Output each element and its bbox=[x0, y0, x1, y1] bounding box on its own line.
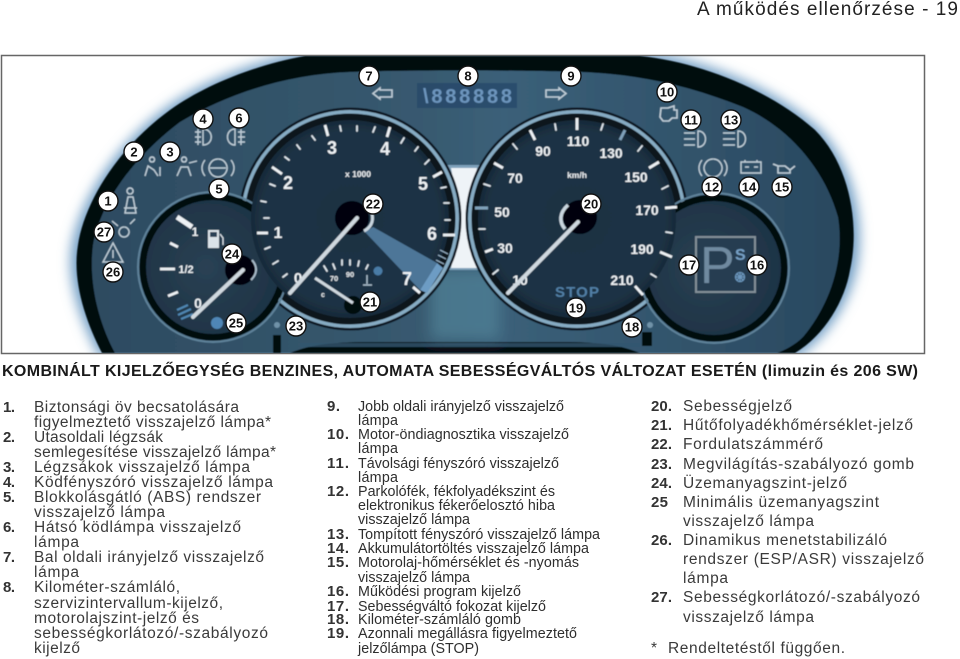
item 9: 9. bbox=[327, 398, 340, 415]
item 19: jelzőlámpa (STOP) bbox=[357, 641, 479, 657]
icon: ESP triangle bbox=[103, 243, 123, 262]
item 6 bbox=[3, 519, 241, 551]
item 8: kijelző bbox=[34, 640, 80, 657]
coolant temperature gauge bbox=[315, 260, 382, 314]
item 7: lámpa bbox=[34, 564, 79, 581]
callout 12: 12 bbox=[705, 180, 719, 194]
dashboard body bbox=[75, 56, 855, 353]
callout 27: 27 bbox=[97, 224, 111, 240]
item 19: Azonnali megállásra figyelmeztető bbox=[358, 626, 577, 642]
dimmer and trip knobs bbox=[273, 322, 653, 353]
item 25 bbox=[651, 494, 880, 530]
icon: seat belt bbox=[124, 188, 137, 213]
item 19 bbox=[327, 625, 577, 657]
item 2: Utasoldali légzsák bbox=[34, 429, 163, 446]
item 26: rendszer (ESP/ASR) visszajelző bbox=[683, 551, 924, 568]
item 1: Biztonsági öv becsatolására bbox=[34, 399, 239, 416]
item 13: Tompított fényszóró visszajelző lámpa bbox=[358, 527, 600, 543]
item 26: lámpa bbox=[683, 570, 728, 587]
item 10: 10. bbox=[327, 426, 349, 443]
icon: rear fog lamp bbox=[228, 129, 245, 145]
callout 5: 5 bbox=[215, 182, 223, 196]
callout 18: 18 bbox=[625, 320, 639, 334]
callout 8: 8 bbox=[464, 68, 472, 84]
fuel gauge: 0 bbox=[194, 295, 202, 311]
callout 13 bbox=[721, 110, 741, 130]
item 5: 5. bbox=[3, 489, 15, 506]
callout 17: 17 bbox=[682, 258, 696, 272]
speedometer: 10 bbox=[512, 272, 528, 288]
icon: speed limiter bbox=[112, 219, 135, 237]
callout 23 bbox=[286, 316, 306, 336]
item 8 bbox=[3, 579, 268, 657]
callout 16 bbox=[747, 255, 767, 275]
speedometer: 170 bbox=[635, 202, 659, 218]
tachometer red-zone wedge bbox=[365, 227, 448, 293]
callout 13: 13 bbox=[724, 112, 738, 128]
item 26 bbox=[651, 532, 924, 587]
coolant temperature gauge: 90 bbox=[346, 270, 354, 279]
callout 14 bbox=[739, 177, 759, 197]
callout 15: 15 bbox=[775, 180, 789, 194]
item 8: motorolajszint-jelző és bbox=[34, 610, 199, 627]
item 25: Minimális üzemanyagszint bbox=[683, 494, 880, 511]
callout 11 bbox=[681, 110, 701, 130]
item 15: visszajelző lámpa bbox=[358, 570, 470, 586]
item 18: Kilométer-számláló gomb bbox=[358, 612, 521, 628]
callout 12 bbox=[702, 177, 722, 197]
item 12: visszajelző lámpa bbox=[358, 512, 470, 528]
callout 22 bbox=[363, 194, 383, 214]
callout 19: 19 bbox=[569, 300, 583, 316]
item 27: 27. bbox=[651, 589, 672, 606]
callout 7: 7 bbox=[365, 68, 373, 84]
item 3: Légzsákok visszajelző lámpa bbox=[34, 459, 250, 476]
footnote: * bbox=[651, 640, 657, 657]
callout 26 bbox=[103, 262, 123, 282]
item 15 bbox=[327, 554, 579, 586]
item 6: Hátsó ködlámpa visszajelző bbox=[34, 519, 241, 536]
item 6: 6. bbox=[3, 519, 15, 536]
item 12: Parkolófék, fékfolyadékszint és bbox=[358, 484, 555, 500]
callout 20: 20 bbox=[584, 196, 598, 212]
callout 3: 3 bbox=[166, 144, 174, 160]
item 15: 15. bbox=[327, 554, 349, 571]
callout 2 bbox=[124, 142, 144, 162]
item 13: 13. bbox=[327, 526, 349, 543]
speedometer: 210 bbox=[610, 272, 634, 288]
item 1: figyelmeztető visszajelző lámpa* bbox=[34, 414, 271, 431]
icon: front fog lamp bbox=[195, 129, 211, 145]
low fuel lamp bbox=[211, 317, 223, 329]
callout 10 bbox=[657, 82, 677, 102]
tachometer: 3 bbox=[327, 138, 337, 158]
lighter lower centre panel bbox=[430, 270, 500, 340]
item 10: Motor-öndiagnosztika visszajelző bbox=[358, 427, 569, 443]
speedometer: km/h bbox=[567, 170, 587, 180]
item 22: Fordulatszámmérő bbox=[683, 436, 823, 453]
gear selector display bbox=[696, 237, 755, 295]
item 23: Megvilágítás-szabályozó gomb bbox=[683, 456, 914, 473]
item 23: 23. bbox=[651, 456, 672, 473]
item 14: 14. bbox=[327, 540, 349, 557]
speedometer: 150 bbox=[624, 169, 648, 185]
callout 24: 24 bbox=[225, 246, 240, 262]
tachometer: 7 bbox=[402, 269, 412, 289]
item 21: 21. bbox=[651, 417, 672, 434]
tachometer bbox=[257, 125, 455, 293]
callout 22: 22 bbox=[366, 196, 380, 212]
legend column 3 bbox=[651, 398, 924, 657]
item 25: visszajelző lámpa bbox=[683, 513, 814, 530]
icon: oil can bbox=[773, 164, 795, 173]
callout 27 bbox=[94, 222, 114, 242]
speedometer: 50 bbox=[494, 204, 510, 220]
callout 25: 25 bbox=[229, 316, 243, 330]
callout 17 bbox=[679, 255, 699, 275]
callout 15 bbox=[772, 177, 792, 197]
gauge rims bbox=[138, 109, 789, 343]
warning lamp icons bbox=[103, 88, 795, 262]
item 27 bbox=[651, 589, 920, 626]
speedometer bbox=[475, 118, 677, 301]
item 12: elektronikus fékerőelosztó hiba bbox=[358, 498, 555, 514]
fuel gauge: 1/2 bbox=[178, 264, 194, 276]
item 17: 17. bbox=[327, 598, 349, 615]
odometer display: \888888 bbox=[423, 86, 512, 108]
instrument cluster illustration bbox=[2, 56, 924, 354]
callout 1 bbox=[98, 191, 118, 211]
speedometer: 70 bbox=[507, 170, 523, 186]
callout 16: 16 bbox=[750, 258, 764, 272]
tachometer: 2 bbox=[283, 173, 293, 193]
callout 6 bbox=[229, 108, 249, 128]
icon: passenger airbag bbox=[145, 157, 160, 176]
callout 7 bbox=[359, 66, 379, 86]
item 6: lámpa bbox=[34, 534, 79, 551]
item 5: visszajelző lámpa bbox=[34, 504, 165, 521]
item 20: 20. bbox=[651, 398, 672, 415]
callout 6: 6 bbox=[235, 110, 243, 126]
gauge faces bbox=[146, 120, 781, 335]
item 12 bbox=[327, 483, 555, 528]
item 11 bbox=[327, 455, 559, 486]
callout 18 bbox=[622, 317, 642, 337]
item 16: Működési program kijelző bbox=[358, 584, 521, 600]
item 22: 22. bbox=[651, 436, 672, 453]
icon: right turn arrow bbox=[546, 88, 566, 99]
item 14: Akkumulátortöltés visszajelző lámpa bbox=[358, 541, 589, 557]
tachometer: 5 bbox=[418, 174, 428, 194]
item 27: Sebességkorlátozó/-szabályozó bbox=[683, 589, 920, 606]
item 8: sebességkorlátozó/-szabályozó bbox=[34, 625, 268, 642]
callout 2: 2 bbox=[130, 144, 138, 160]
tachometer: 0 bbox=[294, 270, 302, 287]
item 26: 26. bbox=[651, 532, 672, 549]
tachometer: x 1000 bbox=[345, 169, 371, 179]
callout 23: 23 bbox=[289, 318, 303, 334]
item 9: Jobb oldali irányjelző visszajelző bbox=[358, 399, 564, 415]
callout 19 bbox=[566, 298, 586, 318]
item 7: 7. bbox=[3, 549, 15, 566]
illustration frame bbox=[2, 56, 924, 354]
item 1: 1. bbox=[3, 399, 15, 416]
callout 8 bbox=[458, 66, 478, 86]
section heading: KOMBINÁLT KIJELZŐEGYSÉG BENZINES, AUTOMATA SEBESSÉGVÁLTÓS VÁLTOZAT ESETÉN (limuzin és 206 SW) bbox=[2, 361, 918, 380]
speedometer: 30 bbox=[497, 240, 513, 256]
footnote: Rendeltetéstől függően. bbox=[668, 640, 845, 657]
tachometer: 4 bbox=[380, 139, 390, 159]
item 7 bbox=[3, 549, 264, 581]
callout 25 bbox=[226, 313, 246, 333]
callout 21 bbox=[360, 292, 380, 312]
item 27: visszajelző lámpa bbox=[683, 609, 814, 626]
item 21: Hűtőfolyadékhőmérséklet-jelző bbox=[683, 417, 913, 434]
numbered callouts bbox=[94, 66, 792, 337]
item 17: Sebességváltó fokozat kijelző bbox=[358, 599, 546, 615]
speedometer: 190 bbox=[630, 241, 654, 257]
item 24: Üzemanyagszint-jelző bbox=[683, 474, 847, 492]
callout 3 bbox=[160, 142, 180, 162]
coolant temperature gauge: c bbox=[321, 292, 325, 299]
icon: main beam bbox=[684, 131, 706, 147]
callout 4: 4 bbox=[199, 112, 207, 126]
callout 11: 11 bbox=[684, 112, 698, 128]
icon: brake warning bbox=[699, 159, 727, 177]
item 5: Blokkolásgátló (ABS) rendszer bbox=[34, 489, 261, 506]
item 11: 11. bbox=[327, 455, 349, 472]
item 4: Ködfényszóró visszajelző lámpa bbox=[34, 474, 273, 491]
item 1 bbox=[3, 399, 271, 431]
item 10 bbox=[327, 426, 569, 457]
callout 24 bbox=[222, 244, 242, 264]
icon: airbag bbox=[177, 157, 197, 176]
item 4: 4. bbox=[3, 474, 15, 491]
item 19: 19. bbox=[327, 625, 349, 642]
callout 20 bbox=[581, 194, 601, 214]
coolant temperature gauge: 70 bbox=[330, 274, 338, 283]
speedometer: 110 bbox=[567, 133, 590, 149]
item 9 bbox=[327, 398, 564, 429]
fuel gauge bbox=[160, 217, 256, 329]
item 25: 25 bbox=[651, 494, 668, 511]
fuel gauge: 1 bbox=[192, 225, 199, 239]
callout 14: 14 bbox=[742, 180, 757, 194]
bright pillar between the gauges bbox=[445, 165, 483, 270]
item 24: 24. bbox=[651, 475, 672, 492]
icon: battery bbox=[741, 160, 761, 173]
icon: fuel pump bbox=[208, 230, 223, 248]
legend column 2 bbox=[327, 398, 600, 657]
tachometer: 1 bbox=[274, 225, 283, 242]
icon: left turn arrow bbox=[373, 88, 392, 99]
item 2: 2. bbox=[3, 429, 15, 446]
item 8: Kilométer-számláló, bbox=[34, 579, 180, 596]
item 18: 18. bbox=[327, 611, 349, 628]
item 16: 16. bbox=[327, 583, 349, 600]
callout 9 bbox=[561, 66, 581, 86]
gear selector display: P bbox=[700, 237, 735, 295]
item 8: szervizintervallum-kijelző, bbox=[34, 595, 223, 612]
STOP lamp: STOP bbox=[555, 284, 599, 301]
item 8: 8. bbox=[3, 579, 15, 596]
item 7: Bal oldali irányjelző visszajelző bbox=[34, 549, 264, 566]
callout 1: 1 bbox=[104, 194, 112, 208]
callout 26: 26 bbox=[106, 264, 120, 280]
item 12: 12. bbox=[327, 483, 349, 500]
callout 10: 10 bbox=[660, 84, 674, 100]
legend column 1 bbox=[3, 399, 276, 657]
item 11: lámpa bbox=[358, 470, 398, 486]
icon: snowflake bbox=[735, 272, 745, 282]
item 5 bbox=[3, 489, 261, 521]
callout 5 bbox=[209, 179, 229, 199]
item 10: lámpa bbox=[358, 441, 398, 457]
item 3: 3. bbox=[3, 459, 15, 476]
item 2: semlegesítése visszajelző lámpa* bbox=[34, 444, 276, 461]
tachometer: 6 bbox=[427, 224, 437, 244]
icon: engine bbox=[660, 106, 677, 121]
gear selector display: S bbox=[735, 247, 746, 264]
callout 21: 21 bbox=[363, 294, 377, 310]
item 15: Motorolaj-hőmérséklet és -nyomás bbox=[358, 555, 579, 571]
speedometer: 90 bbox=[535, 143, 551, 159]
item 2 bbox=[3, 429, 276, 461]
item 20: Sebességjelző bbox=[683, 398, 792, 415]
item 26: Dinamikus menetstabilizáló bbox=[683, 532, 887, 549]
item 11: Távolsági fényszóró visszajelző bbox=[358, 456, 559, 472]
icon: ABS bbox=[202, 159, 234, 177]
item 9: lámpa bbox=[358, 413, 398, 429]
speedometer: 130 bbox=[599, 145, 623, 161]
icon: reserve hatch bbox=[177, 305, 193, 319]
callout 9: 9 bbox=[567, 68, 575, 84]
callout 4 bbox=[193, 109, 213, 129]
icon: dipped beam bbox=[723, 131, 746, 147]
